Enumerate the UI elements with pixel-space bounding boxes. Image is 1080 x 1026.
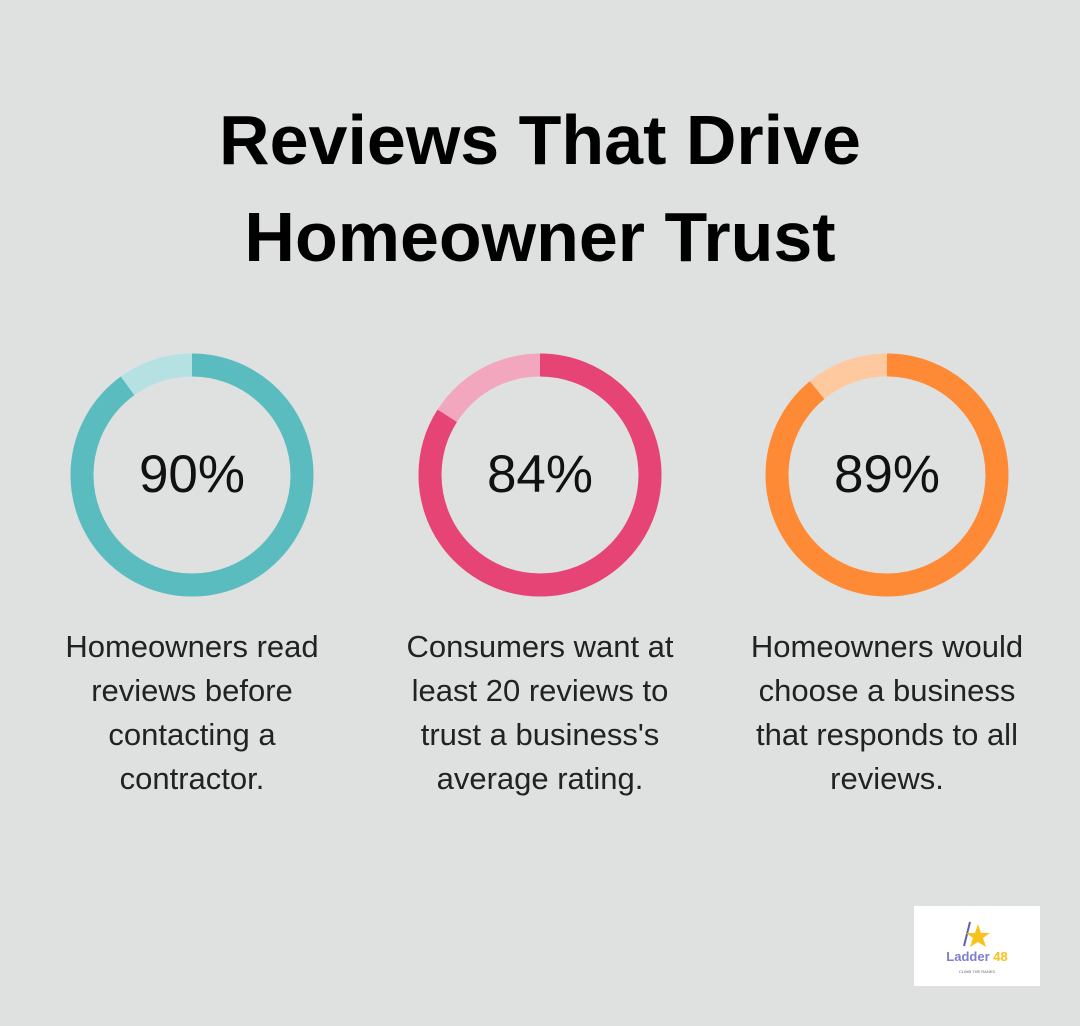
donut: 90% (70, 354, 314, 596)
logo: CLIMB THE RANKS (959, 969, 995, 974)
title: Homeowner Trust (244, 198, 836, 276)
logo: Ladder 48 (946, 949, 1008, 964)
donut: 84% (418, 354, 662, 596)
donut: 89%: 89% (834, 445, 940, 504)
donut: 89% (766, 354, 1008, 596)
title (219, 101, 861, 276)
donut: 84%: 84% (487, 445, 593, 504)
text: 84% caption: Consumers want at least 20 reviews to trust a business's average rating. (406, 629, 674, 796)
logo (914, 906, 1040, 986)
title: Reviews That Drive (219, 101, 861, 179)
text: 89% caption: Homeowners would choose a business that responds to all reviews. (751, 629, 1023, 796)
donut: 90%: 90% (139, 445, 245, 504)
text: 90% caption: Homeowners read reviews before contacting a contractor. (65, 629, 319, 796)
